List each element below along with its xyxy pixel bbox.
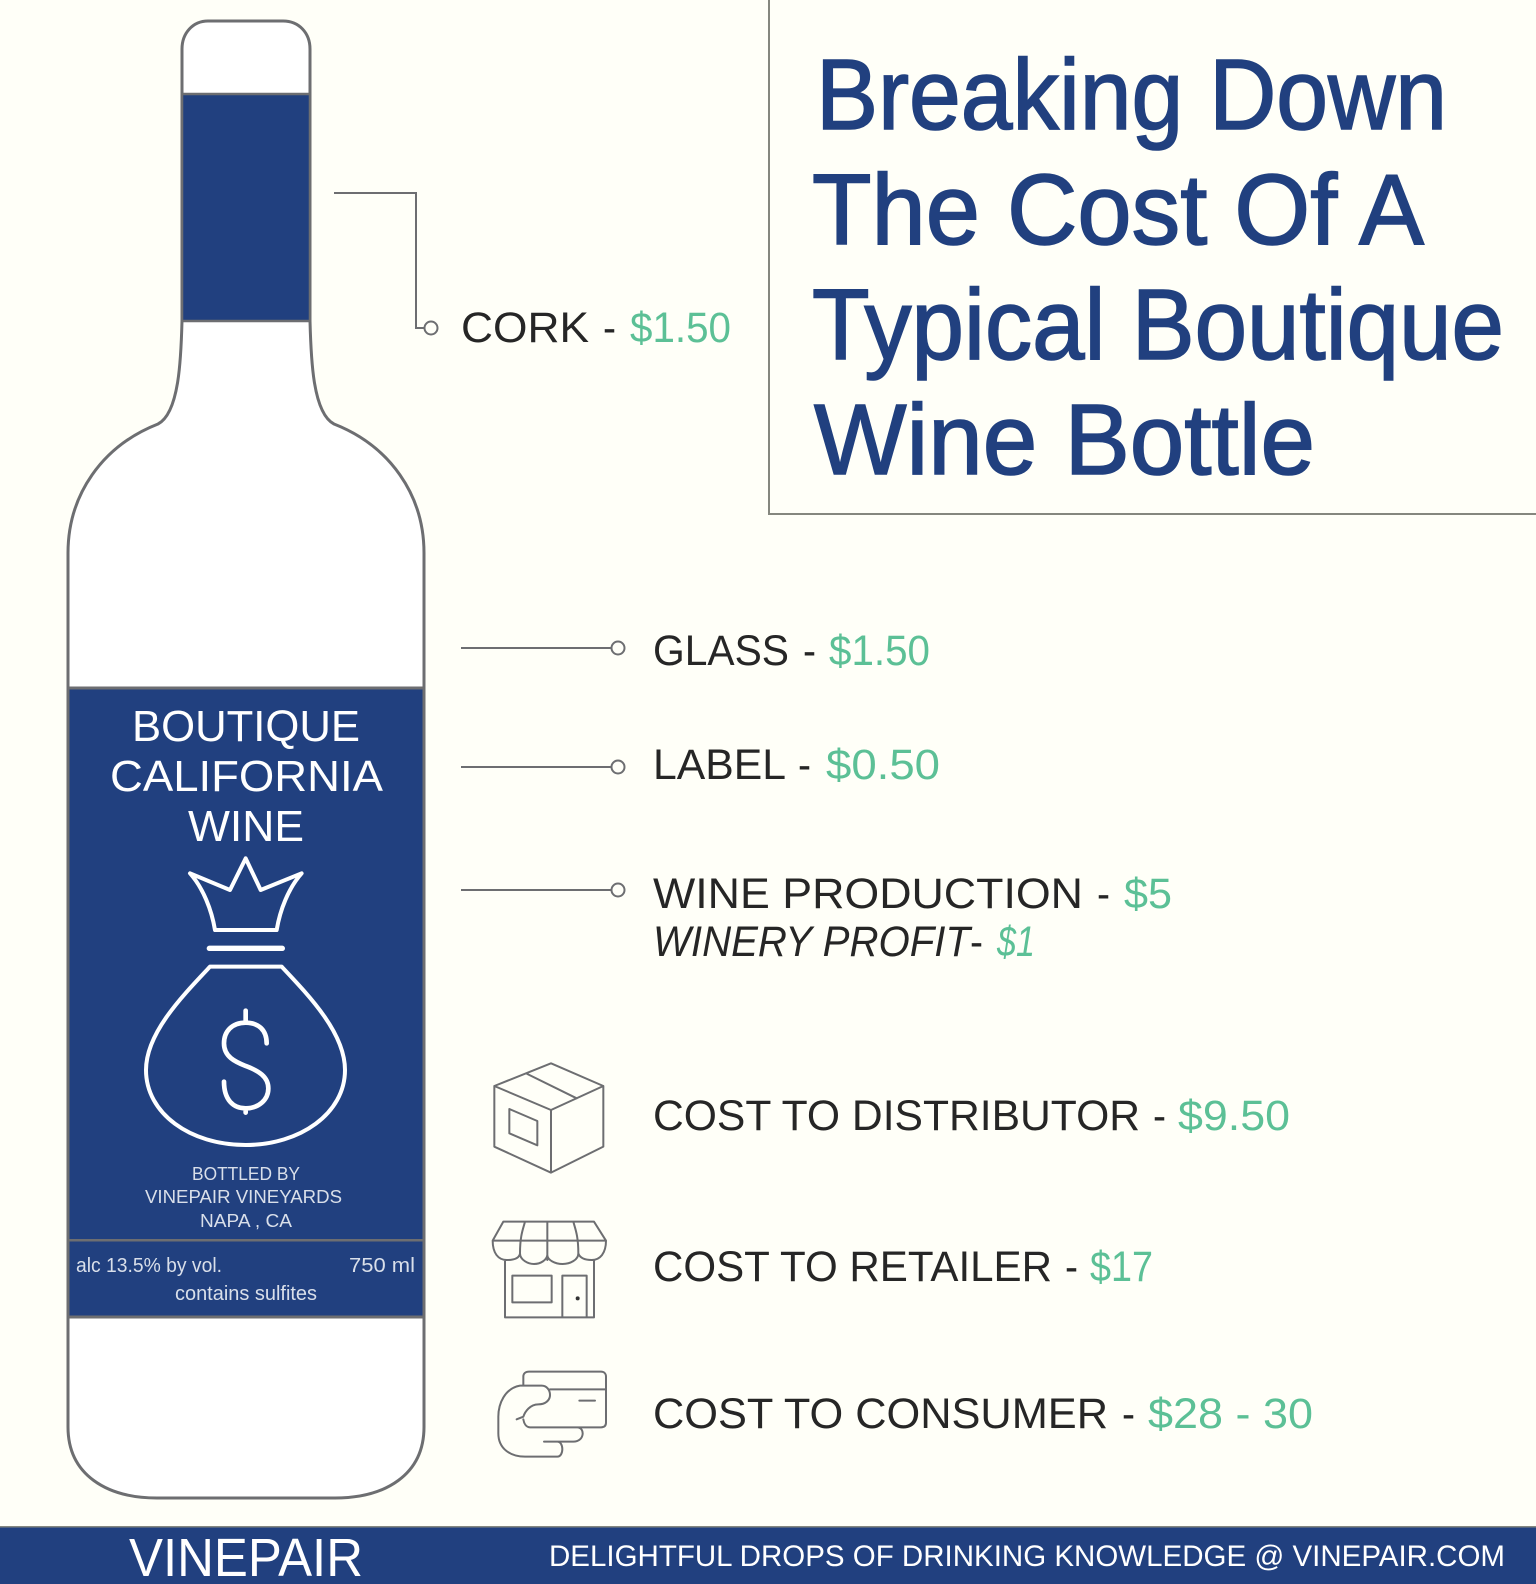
title: Wine Bottle (814, 384, 1315, 496)
cost to consumer: COST TO CONSUMER (653, 1390, 1108, 1438)
label heading: CALIFORNIA (110, 752, 384, 801)
title: Breaking Down (816, 39, 1447, 151)
callout: glass (461, 627, 930, 675)
alcohol and volume details: 750 ml (349, 1255, 415, 1277)
callout: wine production: - (1097, 870, 1110, 918)
footer bar (0, 1526, 1536, 1584)
bottler details: BOTTLED BY (192, 1164, 300, 1184)
bottler details: NAPA , CA (200, 1211, 292, 1231)
cost to retailer: COST TO RETAILER (653, 1243, 1052, 1291)
label heading: WINE (188, 802, 304, 851)
cost to consumer: $28 - 30 (1148, 1390, 1313, 1438)
footer tagline: DELIGHTFUL DROPS OF DRINKING KNOWLEDGE @ VINEPAIR.COM (549, 1540, 1505, 1573)
icon: shipping box (494, 1063, 603, 1173)
callout: cork: - (603, 304, 616, 352)
winery profit: - (970, 918, 983, 966)
callout: label: $0.50 (826, 741, 940, 789)
cost to distributor: - (1153, 1092, 1166, 1140)
title panel (769, 0, 1536, 514)
callout: glass: GLASS (653, 627, 789, 675)
callout: label: - (798, 741, 811, 789)
cost to distributor: $9.50 (1178, 1092, 1290, 1140)
callout: glass: $1.50 (829, 627, 930, 675)
cost to retailer: - (1065, 1243, 1078, 1291)
bottler details: VINEPAIR VINEYARDS (145, 1187, 342, 1207)
bottler details (145, 1164, 342, 1231)
callout: cork (334, 193, 731, 352)
alcohol and volume details: alc 13.5% by vol. (76, 1255, 222, 1277)
callout: wine production (461, 870, 1172, 966)
title: The Cost Of A (812, 154, 1424, 266)
icon: crowned money bag (146, 858, 345, 1145)
callout: wine production: WINE PRODUCTION (653, 870, 1083, 918)
cost to consumer: - (1122, 1390, 1135, 1438)
title: Typical Boutique (812, 269, 1504, 381)
neck capsule (182, 94, 310, 321)
icon: hand holding credit card (498, 1372, 606, 1457)
icon: storefront (493, 1222, 606, 1317)
alcohol and volume details: contains sulfites (175, 1283, 317, 1305)
wine label (68, 688, 424, 1317)
label heading: BOUTIQUE (132, 702, 360, 751)
alcohol and volume details (76, 1255, 415, 1305)
winery profit: $1 (996, 918, 1035, 966)
label heading (110, 702, 384, 851)
callout: cork: CORK (461, 304, 589, 352)
bottle outline (68, 21, 424, 1498)
title (812, 39, 1504, 496)
cost to distributor: COST TO DISTRIBUTOR (653, 1092, 1140, 1140)
wine bottle (68, 21, 424, 1498)
callout: label: LABEL (653, 741, 786, 789)
cost to retailer: $17 (1090, 1243, 1153, 1291)
winery profit: WINERY PROFIT (653, 918, 973, 966)
cost to consumer (653, 1390, 1313, 1438)
callout: glass: - (803, 627, 816, 675)
callout: wine production: $5 (1124, 870, 1172, 918)
callout: cork: $1.50 (630, 304, 731, 352)
callout: label (461, 741, 940, 789)
